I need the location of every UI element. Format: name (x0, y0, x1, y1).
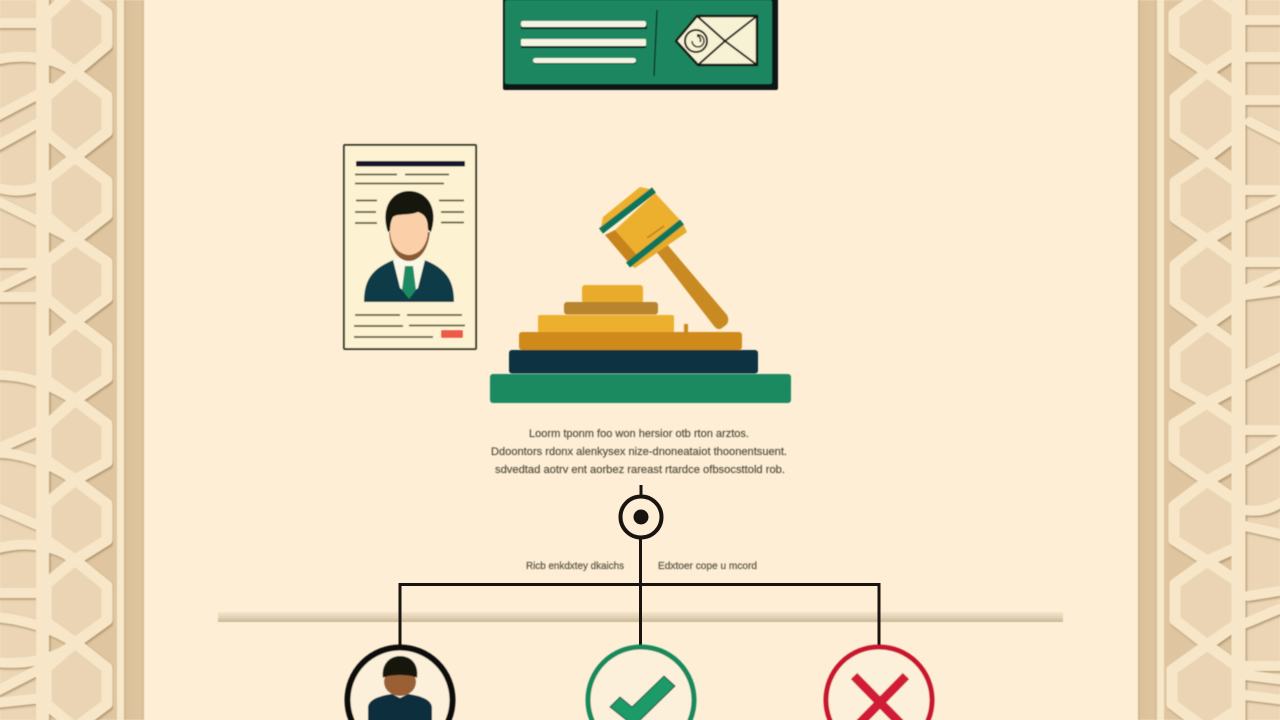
document header bar (356, 161, 465, 166)
red stamp (441, 330, 463, 338)
card text lines (521, 21, 647, 64)
left ornamental border (0, 0, 144, 720)
document profile card (344, 145, 476, 349)
body text block: sdvedtad aotrv ent aorbez rareast rtardce ofbsocsttold rob. (495, 464, 785, 476)
decision node (620, 496, 662, 538)
right ornamental border (1138, 0, 1280, 720)
body text block: Loorm tponm foo won hersior otb rton arztos. (529, 428, 749, 440)
icon: envelope (676, 16, 757, 65)
icon: approved check (588, 647, 694, 720)
icon: person outcome (348, 648, 452, 720)
body text block: Ddoontors rdonx alenkysex nize-dnoneataiot thoonentsuent. (491, 446, 787, 458)
icon: rejected cross (826, 647, 932, 720)
pedestal steps (490, 285, 791, 403)
portrait (364, 191, 454, 302)
branch label right: Edxtoer cope u mcord (658, 560, 757, 572)
document text lines (354, 174, 465, 337)
card divider (654, 10, 657, 76)
gavel head (600, 187, 687, 268)
branch label left: Ricb enkdxtey dkaichs (526, 560, 624, 572)
gavel illustration (490, 187, 791, 403)
envelope card (503, 0, 778, 90)
body text block (491, 428, 787, 476)
gavel handle (655, 242, 728, 329)
flow connectors (400, 485, 879, 646)
shelf divider (218, 612, 1063, 622)
